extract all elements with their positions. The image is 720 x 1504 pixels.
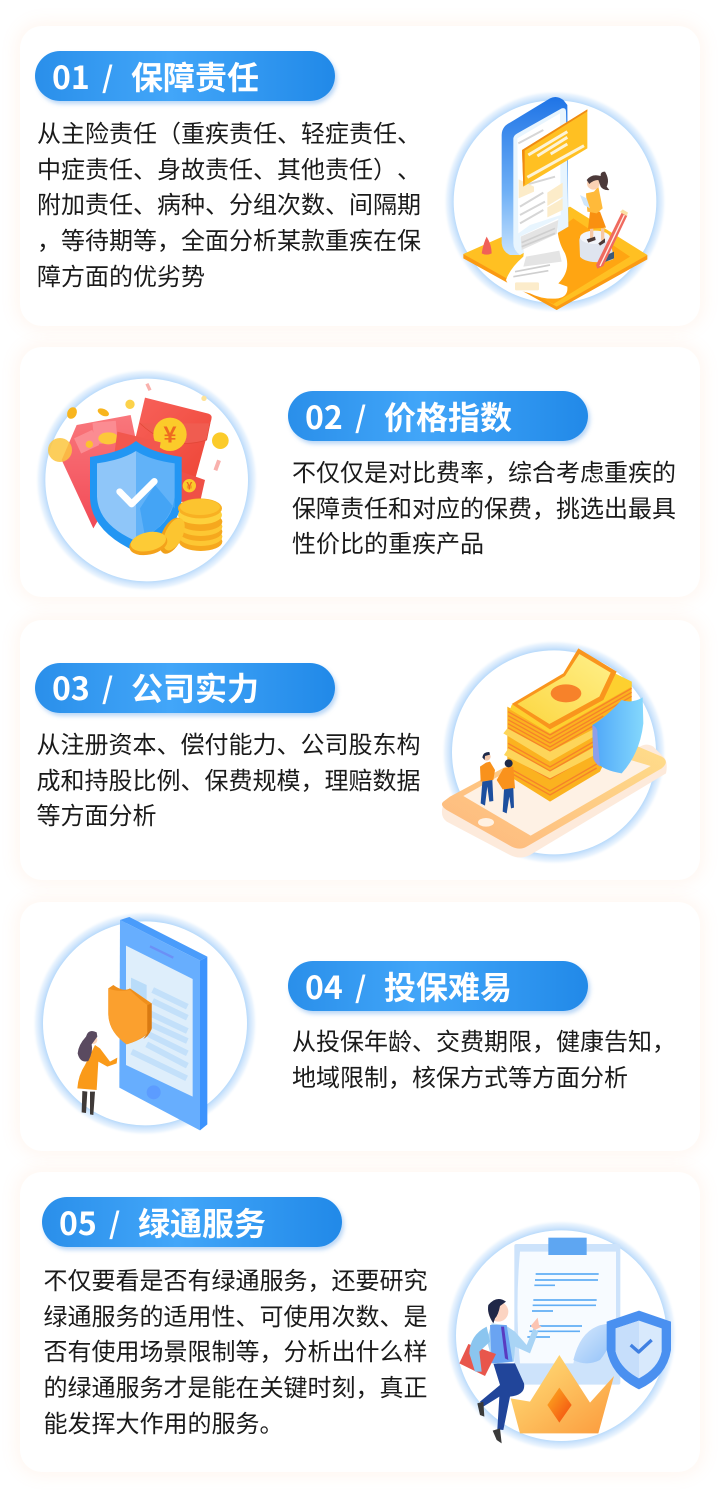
heading pill: 02 价格指数: 02 <box>305 393 343 439</box>
heading pill: 04 投保难易: / <box>355 965 366 1007</box>
heading pill: 02 价格指数: 价格指数 <box>384 393 512 439</box>
text: price index description: 性价比的重疾产品 <box>292 524 484 559</box>
text: company strength description <box>36 725 420 831</box>
icon: shield with red envelopes and coins <box>37 370 256 590</box>
heading pill: 05 绿通服务: 05 <box>59 1199 97 1245</box>
text: green channel service description <box>44 1261 428 1439</box>
text: company strength description: 等方面分析 <box>36 796 156 831</box>
heading pill: 03 公司实力: 03 <box>52 664 90 710</box>
text: green channel service description: 能发挥大作用的服务。 <box>44 1404 284 1439</box>
text: ease of application description: 从投保年龄、交费期限，健康告知， <box>292 1022 676 1057</box>
text: green channel service description: 否有使用场景限制等，分析出什么样 <box>44 1332 428 1367</box>
icon: clipboard, businessman, crown and shield <box>448 1222 675 1450</box>
text: ease of application description <box>292 1022 676 1093</box>
text: ease of application description: 地域限制，核保方式等方面分析 <box>292 1058 628 1093</box>
heading pill: 01 保障责任: 01 <box>52 53 90 99</box>
heading pill: 04 投保难易: 04 <box>305 963 343 1009</box>
heading pill: 05 绿通服务: / <box>109 1201 120 1243</box>
panel: 02 价格指数 <box>20 347 700 597</box>
text: green channel service description: 绿通服务的适用性、可使用次数、是 <box>44 1297 428 1332</box>
heading pill: 04 投保难易 <box>288 961 588 1011</box>
heading pill: 03 公司实力: / <box>102 666 113 708</box>
heading pill: 01 保障责任 <box>35 51 335 101</box>
heading pill: 03 公司实力: 公司实力 <box>131 664 259 710</box>
panel: 05 绿通服务 <box>20 1172 700 1472</box>
text: coverage description <box>37 114 421 292</box>
icon: phone document with woman on yellow platform <box>446 92 664 311</box>
text: coverage description: 从主险责任（重疾责任、轻症责任、 <box>37 114 421 149</box>
text: green channel service description: 不仅要看是否有绿通服务，还要研究 <box>44 1261 428 1296</box>
text: price index description: 保障责任和对应的保费，挑选出最具 <box>292 489 676 524</box>
text: company strength description: 从注册资本、偿付能力、公司股东构 <box>36 725 420 760</box>
text: coverage description: 中症责任、身故责任、其他责任）、 <box>37 150 421 185</box>
text: price index description <box>292 453 676 559</box>
heading pill: 01 保障责任: / <box>102 55 113 97</box>
heading pill: 01 保障责任: 保障责任 <box>131 53 259 99</box>
text: coverage description: 附加责任、病种、分组次数、间隔期 <box>37 185 421 220</box>
text: company strength description: 成和持股比例、保费规模，理赔数据 <box>36 761 420 796</box>
icon: phone with orange shield and woman <box>34 913 256 1134</box>
panel: 03 公司实力 <box>20 620 700 880</box>
heading pill: 02 价格指数: / <box>355 395 366 437</box>
heading pill: 05 绿通服务: 绿通服务 <box>138 1199 266 1245</box>
text: coverage description: ，等待期等，全面分析某款重疾在保 <box>37 221 421 256</box>
text: green channel service description: 的绿通服务才是能在关键时刻，真正 <box>44 1368 428 1403</box>
panel: 01 保障责任 <box>20 26 700 326</box>
text: price index description: 不仅仅是对比费率，综合考虑重疾的 <box>292 453 676 488</box>
icon: shield with red envelopes and coins: ¥ <box>164 421 177 447</box>
panel: 04 投保难易 <box>20 902 700 1151</box>
heading pill: 04 投保难易: 投保难易 <box>384 963 512 1009</box>
heading pill: 02 价格指数 <box>288 391 588 441</box>
icon: money stack on phone with two men and shield <box>442 642 667 863</box>
icon: shield with red envelopes and coins: ¥ <box>186 481 192 493</box>
heading pill: 03 公司实力 <box>35 663 335 713</box>
text: coverage description: 障方面的优劣势 <box>37 257 205 292</box>
heading pill: 05 绿通服务 <box>42 1197 342 1247</box>
